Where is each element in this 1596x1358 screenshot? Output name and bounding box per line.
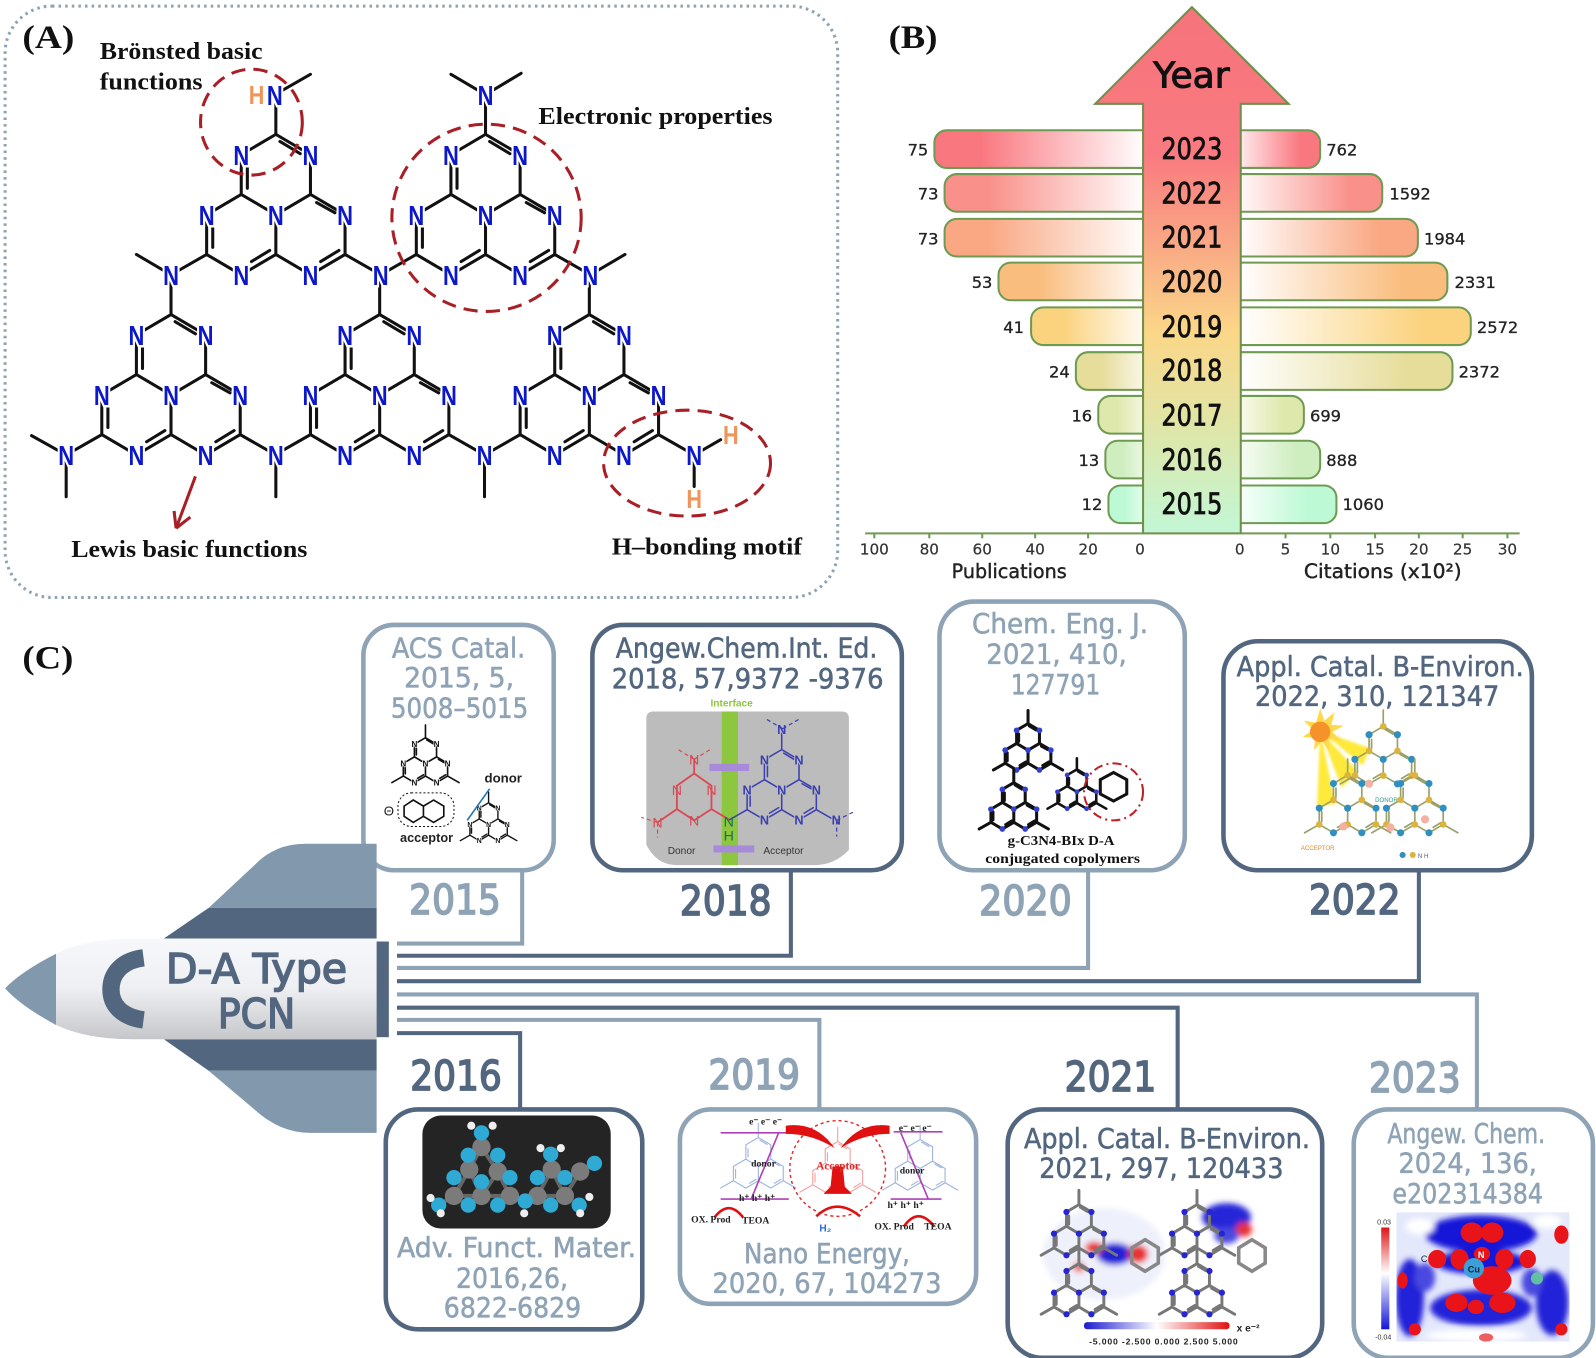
thumbnail: donor acceptor structure: N — [411, 779, 417, 788]
thumbnail: donor acceptor structure: N — [434, 740, 440, 749]
thumbnail: interface diagram: Donor — [668, 846, 696, 857]
hydrogen atoms — [249, 82, 739, 514]
card 2021: 2021, 297, 120433 — [1039, 1153, 1284, 1185]
bridging nitrogen atoms: N — [163, 261, 179, 292]
heptazine unit bottom right: N — [581, 381, 597, 412]
year labels: 2023 — [1161, 132, 1222, 166]
thumbnail: donor acceptor structure: N — [477, 806, 482, 813]
thumbnail: donor acceptor energy diagram: donor — [751, 1158, 777, 1169]
axes with ticks — [865, 533, 1520, 538]
heptazine unit top right: N — [443, 261, 459, 292]
year labels: 2015 — [1161, 487, 1222, 521]
thumbnail: donor acceptor structure: N — [477, 838, 482, 845]
card 2020: 2021, 410, — [986, 639, 1127, 671]
card 2016: 2016,26, — [456, 1263, 568, 1295]
thumbnail: interface diagram: N — [689, 752, 699, 768]
heptazine unit bottom left: N — [128, 321, 144, 352]
axis title: Citations: Citations (x10²) — [1304, 560, 1462, 583]
publication values: 16 — [1071, 406, 1092, 425]
rocket tail block — [377, 942, 389, 1037]
panel A: molecular structure — [5, 6, 838, 597]
heptazine unit top left: N — [199, 201, 215, 232]
heptazine unit bottom left — [66, 275, 276, 472]
card 2015: 5008–5015 — [391, 693, 528, 725]
card 2023: Angew. Chem. — [1387, 1118, 1545, 1150]
year 2020: 2020 — [979, 877, 1072, 925]
thumbnail: copolymer structure: conjugated copolymers — [985, 851, 1141, 866]
card 2018 — [592, 625, 902, 870]
panel A dotted frame — [5, 6, 838, 597]
card 2023 — [1354, 1109, 1593, 1358]
thumbnail: charge density heat map: N — [1478, 1250, 1485, 1260]
panel B label: (B) — [889, 20, 937, 56]
polymer bonds and nitrogen atoms — [32, 73, 739, 514]
citations axis labels: 20 — [1409, 541, 1429, 559]
year labels: 2021 — [1161, 220, 1222, 254]
card 2019: Nano Energy, — [744, 1238, 910, 1270]
thumbnail: sunlight on polymer: N H — [1418, 853, 1428, 860]
thumbnail: interface diagram: N — [794, 752, 804, 767]
card 2021: Appl. Catal. B-Environ. — [1024, 1123, 1310, 1155]
bridging nitrogen atoms: N — [268, 441, 284, 472]
citations axis labels: 5 — [1281, 541, 1290, 559]
citation values: 2372 — [1459, 363, 1500, 382]
rocket C stripe — [111, 958, 144, 1020]
year labels — [1161, 132, 1222, 521]
heptazine unit bottom right: N — [616, 321, 632, 352]
publication values: 12 — [1082, 495, 1102, 514]
bridging nitrogen atoms: N — [267, 81, 283, 111]
thumbnail: interface diagram: N — [777, 782, 786, 797]
connector lines — [397, 871, 1477, 1109]
thumbnail: sunlight on polymer — [1301, 708, 1458, 860]
axis title: Publications: Publications — [952, 560, 1067, 583]
thumbnail: donor acceptor structure: N — [423, 759, 429, 768]
citations axis labels: 15 — [1365, 541, 1385, 559]
bridging nitrogen atoms: N — [58, 441, 74, 472]
year 2016: 2016 — [410, 1052, 502, 1100]
heptazine unit bottom middle: N — [337, 441, 353, 472]
rocket title: D-A Type — [166, 945, 347, 993]
thumbnail: interface diagram: N — [812, 782, 821, 797]
thumbnail: interface diagram: N — [706, 783, 717, 799]
citation values: 1592 — [1389, 184, 1431, 203]
panel B: publications and citations chart — [860, 7, 1520, 583]
thumbnail: charge density heat map: Cu — [1468, 1264, 1480, 1274]
thumbnail: interface diagram: H — [724, 829, 734, 845]
year 2023: 2023 — [1369, 1054, 1461, 1102]
heptazine unit top right: N — [478, 201, 493, 232]
card 2016 — [386, 1109, 642, 1329]
thumbnail: charge density maps: x e⁻² — [1237, 1323, 1260, 1334]
card 2022: Appl. Catal. B-Environ. — [1237, 651, 1524, 683]
thumbnail: charge density maps: -5.000 -2.500 0.000 2.500 5.000 — [1089, 1337, 1238, 1347]
heptazine unit bottom right — [485, 275, 694, 472]
citations bars — [1221, 130, 1471, 523]
rocket nose — [5, 954, 56, 1025]
citations axis labels — [1235, 541, 1517, 559]
card 2018: 2018, 57,9372 -9376 — [612, 663, 883, 695]
card 2021 — [1008, 1109, 1322, 1358]
year 2022: 2022 — [1309, 876, 1401, 924]
panel C label: (C) — [22, 641, 73, 677]
publications axis labels — [860, 541, 1145, 559]
publications axis labels: 20 — [1078, 541, 1098, 559]
heptazine unit top left: N — [303, 261, 318, 292]
year labels: 2016 — [1161, 443, 1222, 477]
rocket — [5, 844, 389, 1133]
heptazine unit top right — [381, 95, 590, 292]
thumbnail: interface diagram — [641, 698, 853, 865]
year labels: 2019 — [1161, 310, 1222, 344]
thumbnail: interface diagram: N — [832, 812, 841, 827]
card 2015: ACS Catal. — [392, 633, 525, 665]
label: Lewis basic functions: Lewis basic functions — [71, 536, 307, 563]
heptazine unit top left: N — [337, 201, 353, 232]
card 2015 — [363, 625, 554, 870]
thumbnail: donor acceptor structure: acceptor — [400, 830, 453, 845]
heptazine unit bottom middle: N — [406, 321, 422, 352]
heptazine unit bottom right: N — [651, 381, 666, 412]
thumbnail: interface diagram: N — [689, 813, 699, 829]
heptazine unit bottom left: N — [94, 381, 110, 412]
thumbnail: donor acceptor energy diagram: OX. Prod — [691, 1214, 731, 1225]
thumbnail: donor acceptor structure: Θ — [384, 803, 394, 818]
year labels: 2018 — [1161, 354, 1222, 388]
thumbnail: donor acceptor energy diagram: TEOA — [742, 1215, 769, 1226]
heptazine unit bottom middle: N — [406, 441, 422, 472]
dashed circle: electronic properties — [392, 124, 581, 311]
thumbnail: charge density heat map: -0.04 — [1375, 1333, 1391, 1341]
publications axis labels: 100 — [860, 541, 889, 559]
heptazine unit bottom middle: N — [372, 381, 388, 412]
year 2019: 2019 — [708, 1051, 800, 1099]
thumbnail: donor acceptor energy diagram: H₂ — [819, 1224, 831, 1235]
heptazine unit top left: N — [303, 141, 318, 172]
thumbnail: sunlight on polymer: DONOR — [1375, 797, 1398, 804]
citation values: 762 — [1326, 141, 1357, 160]
thumbnail: donor acceptor structure: N — [445, 759, 451, 768]
citation values — [1310, 141, 1518, 514]
label: Bronsted basic functions: functions — [100, 69, 203, 96]
year 2021: 2021 — [1065, 1053, 1156, 1101]
thumbnail: donor acceptor structure: N — [411, 740, 417, 749]
hydrogen atoms: H — [249, 82, 264, 110]
card 2023: e202314384 — [1392, 1178, 1543, 1210]
arrow title: Year: Year — [1152, 56, 1230, 97]
card 2022 — [1223, 641, 1532, 870]
publications bars — [934, 130, 1163, 523]
heptazine unit top right: N — [512, 261, 528, 292]
thumbnail: donor acceptor structure: donor — [485, 771, 522, 786]
heptazine unit top right: N — [512, 141, 528, 172]
heptazine unit top left: N — [268, 201, 284, 232]
heptazine unit bottom left: N — [198, 441, 214, 472]
heptazine unit top right: N — [443, 141, 459, 172]
year labels: 2020 — [1161, 265, 1222, 299]
thumbnail: interface diagram: N — [794, 812, 804, 827]
heptazine unit top left: N — [233, 141, 249, 172]
year 2018: 2018 — [680, 877, 772, 925]
thumbnail: copolymer structure: g-C3N4-BIx D-A — [1008, 833, 1115, 848]
thumbnail: donor acceptor energy diagram: e⁻ e⁻ e⁻ — [899, 1123, 932, 1134]
thumbnail: interface diagram: Acceptor — [763, 846, 804, 857]
citation values: 1984 — [1424, 229, 1465, 248]
publication values: 73 — [918, 184, 938, 203]
rocket title: PCN — [218, 990, 295, 1038]
upper wing — [209, 844, 377, 908]
heptazine unit bottom left: N — [163, 381, 179, 412]
rocket body — [56, 938, 377, 1039]
heptazine unit bottom right: N — [547, 441, 563, 472]
bridging nitrogen atoms: N — [478, 81, 493, 111]
bridging nitrogen atoms — [58, 81, 702, 472]
year labels: 2017 — [1161, 398, 1222, 432]
thumbnail: interface diagram: Interface — [710, 698, 753, 709]
thumbnail: charge density heat map: 0.03 — [1377, 1218, 1391, 1226]
bridging nitrogen atoms: N — [373, 261, 389, 292]
citation values: 2572 — [1477, 318, 1518, 337]
publication values: 24 — [1049, 363, 1070, 382]
thumbnail: charge density maps — [1041, 1190, 1265, 1347]
thumbnail: charge density heat map — [1375, 1212, 1570, 1342]
thumbnail: interface diagram: N — [672, 783, 682, 799]
thumbnail: donor acceptor energy diagram: e⁻ e⁻ e⁻ — [749, 1117, 782, 1128]
thumbnail: interface diagram: N — [760, 752, 769, 767]
hydrogen atoms: H — [686, 486, 702, 514]
card 2019 — [680, 1109, 976, 1304]
thumbnail: interface diagram: N — [724, 814, 734, 830]
publication values: 41 — [1003, 318, 1024, 337]
card 2022: 2022, 310, 121347 — [1255, 680, 1499, 712]
publication values: 53 — [972, 273, 992, 292]
card 2015: 2015, 5, — [404, 662, 514, 694]
publication values: 75 — [908, 141, 928, 160]
label: Bronsted basic functions: Brönsted basic — [100, 38, 263, 65]
dashed circle: Bronsted basic site — [201, 69, 302, 175]
panel C: timeline — [5, 602, 1593, 1358]
thumbnail: donor acceptor structure: N — [495, 838, 500, 845]
heptazine unit bottom middle: N — [441, 381, 457, 412]
heptazine unit top right: N — [547, 201, 563, 232]
bridging nitrogen atoms: N — [477, 441, 492, 472]
thumbnail: interface diagram: N — [777, 722, 786, 737]
card 2016: Adv. Funct. Mater. — [397, 1232, 636, 1264]
thumbnail: interface diagram: N — [652, 816, 663, 832]
publication values: 13 — [1079, 451, 1099, 470]
year labels: 2022 — [1161, 177, 1222, 211]
thumbnail: donor acceptor energy diagram: TEOA — [924, 1222, 952, 1233]
thumbnail: donor acceptor energy diagram: donor — [900, 1166, 925, 1177]
thumbnail: donor acceptor energy diagram — [691, 1117, 958, 1235]
thumbnail: donor acceptor structure: N — [486, 822, 491, 829]
label: H-bonding motif: H–bonding motif — [612, 534, 803, 561]
bridging nitrogen atoms: N — [582, 261, 598, 292]
heptazine unit top left — [171, 95, 381, 292]
thumbnail: interface diagram: N — [760, 812, 769, 827]
heptazine unit bottom left: N — [232, 381, 248, 412]
card 2020 — [939, 602, 1185, 870]
citation values: 1060 — [1343, 495, 1384, 514]
heptazine unit top left: N — [233, 261, 249, 292]
thumbnail: donor acceptor structure: N — [505, 822, 510, 829]
heptazine unit bottom right: N — [547, 321, 563, 352]
citations axis labels: 25 — [1453, 541, 1472, 559]
heptazine unit top right: N — [408, 201, 424, 232]
year 2015: 2015 — [409, 876, 501, 924]
thumbnail: copolymer structure — [979, 711, 1143, 866]
card 2020: Chem. Eng. J. — [972, 608, 1148, 640]
card 2016: 6822-6829 — [444, 1292, 581, 1324]
card 2020: 127791 — [1011, 669, 1100, 701]
thumbnail: donor acceptor energy diagram: Acceptor — [816, 1160, 860, 1172]
heptazine unit bottom middle — [275, 275, 485, 472]
upper wing band — [164, 908, 377, 938]
publications axis labels: 0 — [1135, 541, 1145, 559]
heptazine unit bottom right: N — [512, 381, 528, 412]
citations axis labels: 10 — [1321, 541, 1340, 559]
thumbnail: donor acceptor energy diagram: OX. Prod — [874, 1222, 914, 1233]
panel A label: (A) — [22, 20, 74, 56]
arrow: Lewis basic site — [174, 476, 195, 528]
thumbnail: donor acceptor structure: N — [495, 806, 500, 813]
year arrow — [1095, 7, 1289, 533]
citations axis labels: 30 — [1498, 541, 1517, 559]
citation values: 2331 — [1455, 273, 1496, 292]
thumbnail: donor acceptor structure: N — [400, 759, 406, 768]
hydrogen atoms: H — [723, 422, 739, 450]
heptazine unit bottom middle: N — [303, 381, 318, 412]
publication values — [908, 141, 1102, 514]
citation values: 699 — [1310, 406, 1341, 425]
heptazine unit bottom right: N — [616, 441, 632, 472]
card 2019: 2020, 67, 104273 — [713, 1268, 942, 1300]
publications axis labels: 60 — [973, 541, 992, 559]
heptazine unit bottom left: N — [198, 321, 214, 352]
thumbnail: donor acceptor energy diagram: h⁺ h⁺ h⁺ — [888, 1200, 924, 1211]
heptazine unit bottom left: N — [128, 441, 144, 472]
lower wing — [209, 1071, 377, 1133]
lower wing band — [164, 1039, 377, 1071]
card 2023: 2024, 136, — [1399, 1148, 1537, 1180]
thumbnail: donor acceptor structure — [384, 725, 522, 845]
label: Electronic properties: Electronic properties — [538, 103, 773, 130]
thumbnail: charge density heat map: C — [1421, 1254, 1428, 1264]
thumbnail: interface diagram: N — [743, 782, 752, 797]
heptazine unit bottom middle: N — [337, 321, 353, 352]
card 2018: Angew.Chem.Int. Ed. — [616, 633, 877, 665]
citations axis labels: 0 — [1235, 541, 1245, 559]
thumbnail: donor acceptor structure: N — [434, 779, 440, 788]
thumbnail: sunlight on polymer: ACCEPTOR — [1301, 845, 1335, 852]
publications axis labels: 80 — [920, 541, 939, 559]
thumbnail: donor acceptor structure: N — [467, 822, 472, 829]
citation values: 888 — [1326, 451, 1357, 470]
thumbnail: ball and stick model — [422, 1116, 611, 1229]
bridging nitrogen atoms: N — [686, 441, 702, 472]
publication values: 73 — [918, 229, 938, 248]
dashed circle: H-bonding motif — [604, 410, 771, 516]
publications axis labels: 40 — [1025, 541, 1045, 559]
thumbnail: donor acceptor energy diagram: h⁺ h⁺ h⁺ — [739, 1193, 775, 1204]
